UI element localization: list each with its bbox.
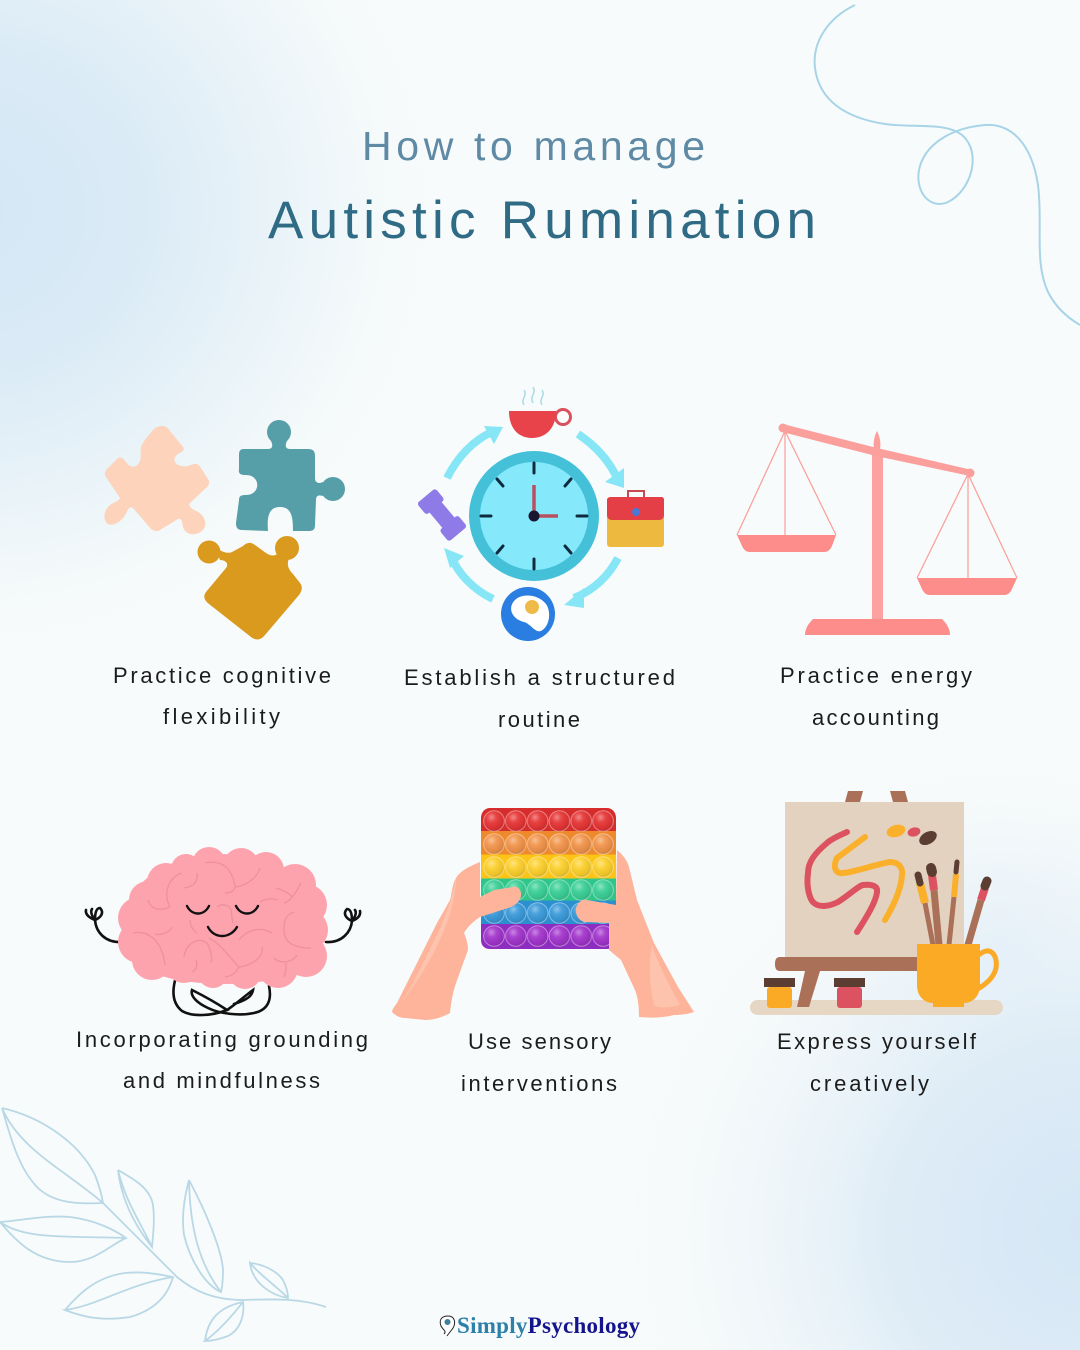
decorative squiggle line [815,5,1080,325]
panel: express creatively [750,791,1003,1096]
left hand [392,862,521,1020]
easel top pegs [845,791,908,802]
icon: balance scale [737,424,1017,635]
icon: head silhouette [440,1316,455,1336]
red paint stroke [807,832,877,932]
label: establish a structured routine [404,665,675,732]
pop-it base [481,808,616,949]
icon: meditating brain [86,847,360,1015]
ground [750,1000,1003,1015]
panel: sensory interventions [392,808,694,1096]
label: practice energy accounting: accounting [812,705,939,730]
brain face [187,906,258,936]
title line 2: Autistic Rumination [268,191,816,250]
icon: hands holding pop-it fidget [392,808,694,1020]
brain folds [133,862,311,977]
pop-it bubbles [483,810,614,948]
icon: peach puzzle piece [104,426,209,534]
label: practice cognitive flexibility: Practice cognitive [113,663,331,688]
icon: coffee cup [509,387,570,438]
left hand highlight [400,878,456,1005]
right hand highlight [650,945,680,1007]
icon: fried egg [501,587,555,641]
label: practice cognitive flexibility: flexibility [163,704,280,729]
label: use sensory interventions: interventions [461,1071,617,1096]
mug [976,951,996,990]
logo: Simply Psychology [440,1313,640,1338]
icon: cycle arrowheads [444,426,624,608]
label: establish a structured routine: routine [498,707,580,732]
canvas [785,802,964,957]
logo wordmark: SimplyPsychology [457,1313,640,1338]
label: express yourself creatively: creatively [810,1071,929,1096]
label: practice cognitive flexibility [113,663,331,729]
label: incorporating grounding and mindfulness [76,1027,368,1093]
label: express yourself creatively [777,1029,977,1096]
panel: grounding and mindfulness [76,847,368,1093]
red paint jar [834,978,865,1008]
label: practice energy accounting [780,663,972,730]
yellow paint stroke [835,837,902,920]
icon: teal puzzle piece [236,420,345,531]
icon: gold puzzle piece [198,536,302,639]
label: use sensory interventions: Use sensory [468,1029,611,1054]
icon: cycle arrows [447,432,618,599]
brain body [118,847,328,989]
label: practice energy accounting: Practice energy [780,663,972,688]
icon: easel with paint and brushes [750,791,1003,1015]
right hand [576,850,694,1018]
title [268,123,816,250]
easel shelf and leg [775,957,925,1007]
icon: clock [469,451,599,581]
decorative leaf branch [0,1108,326,1341]
paint blobs [885,823,907,839]
brain limbs [86,908,360,1015]
yellow paint jar [764,978,795,1008]
panel: energy accounting [737,424,1017,730]
label: incorporating grounding and mindfulness: and mindfulness [123,1068,320,1093]
panel: cognitive flexibility [104,420,345,729]
label: use sensory interventions [461,1029,617,1096]
panel: structured routine [404,387,675,732]
title line 1: How to manage [362,123,705,169]
label: express yourself creatively: Express yourself [777,1029,977,1054]
icon: briefcase [607,491,664,547]
label: incorporating grounding and mindfulness: Incorporating grounding [76,1027,368,1052]
icon: dumbbell [417,488,467,542]
label: establish a structured routine: Establish a structured [404,665,675,690]
brushes [918,862,987,945]
